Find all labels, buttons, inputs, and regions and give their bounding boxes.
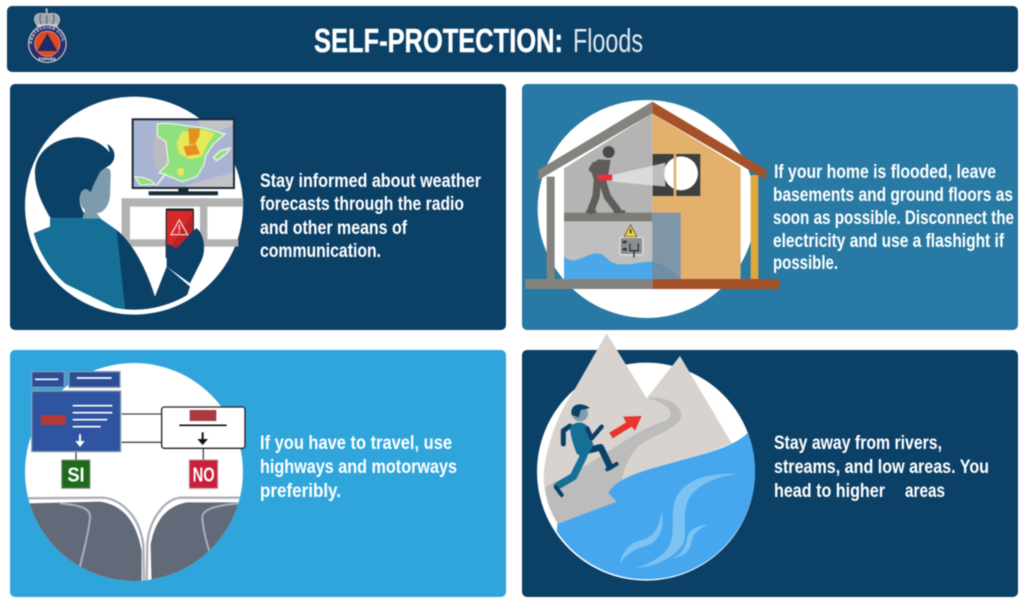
title: Floods	[573, 22, 643, 59]
connectors	[76, 414, 203, 460]
uphill path	[545, 398, 681, 524]
white direction sign: no	[162, 407, 245, 448]
TV stand	[122, 198, 243, 247]
illustration: flooded house cutaway	[525, 100, 779, 318]
SI sign	[62, 460, 90, 488]
SI sign: SI	[67, 464, 85, 487]
person with flashlight	[587, 146, 624, 212]
panel: stay away from rivers	[522, 333, 1018, 597]
text block: highways and motorways	[260, 457, 457, 478]
illustration: person watching TV weather map with phone alert	[25, 97, 243, 317]
text block: areas	[905, 481, 945, 502]
text block: If you have to travel, use	[260, 433, 452, 454]
text block: streams, and low areas. You	[774, 457, 989, 478]
logo: Protección Civil emblem	[27, 8, 68, 64]
text block: possible.	[773, 253, 838, 274]
NO sign	[189, 460, 218, 488]
panel: flooded home	[522, 84, 1018, 330]
blue direction sign: yes	[32, 372, 121, 452]
logo: Protección Civil emblem: ESPAÑA	[38, 56, 57, 61]
text block	[260, 433, 457, 502]
warning sign and electrical box	[620, 225, 643, 257]
highway road	[20, 498, 247, 585]
text block	[774, 433, 989, 502]
flood water	[556, 432, 756, 580]
text block	[260, 171, 482, 262]
phone with alert	[166, 208, 204, 283]
flashlight beam	[613, 163, 665, 187]
text block: Stay informed about weather	[260, 171, 482, 192]
TV with weather map	[132, 118, 235, 195]
text block: head to higher	[774, 481, 886, 502]
text block: forecasts through the radio	[260, 194, 464, 215]
illustration: road signs and highway fork	[20, 363, 247, 585]
header bar	[6, 5, 1019, 73]
house walls	[547, 113, 758, 280]
text block	[773, 162, 1014, 274]
text block: and other means of	[260, 218, 408, 239]
logo: Protección Civil emblem: PROTECCION CIVIL	[28, 25, 66, 44]
text block: preferibly.	[260, 481, 341, 502]
text block: Stay away from rivers,	[774, 433, 942, 454]
red arrow	[609, 416, 642, 438]
water currents	[620, 474, 737, 568]
mountains	[544, 333, 732, 525]
title: SELF-PROTECTION:	[314, 22, 563, 59]
roof and base	[525, 102, 779, 289]
panel: travel on highways	[10, 350, 506, 597]
running person	[556, 404, 617, 495]
NO sign: NO	[193, 464, 215, 487]
panel: stay informed	[10, 84, 506, 330]
person	[30, 137, 190, 317]
flood water	[564, 253, 681, 279]
illustration: person running uphill from water	[536, 334, 756, 582]
window	[653, 154, 700, 196]
text block: communication.	[260, 241, 381, 262]
